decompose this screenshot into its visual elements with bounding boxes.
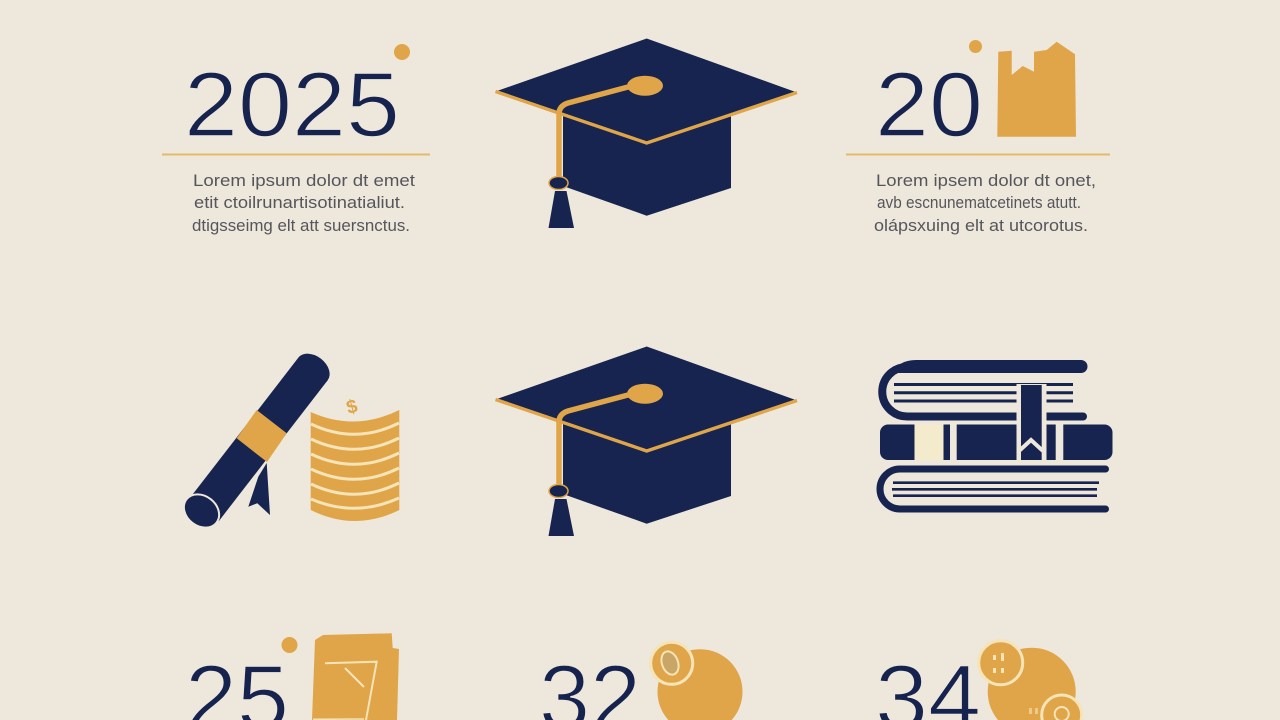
icon: gold document [312, 633, 399, 720]
heading: 2025: 2025 [184, 54, 400, 156]
text block: top left description: dtigsseimg elt att suersnctus. [192, 217, 410, 235]
icon: gold dot [282, 637, 298, 653]
icon: gold coins [979, 641, 1082, 720]
text block: top right description: Lorem ipsem dolor dt onet, [876, 172, 1096, 190]
icon: diploma scroll [177, 347, 336, 535]
panel: bottom centre number and coin [539, 642, 742, 720]
panel: bottom right number and coins [875, 641, 1082, 720]
text block: top right description: olápsxuing elt at utcorotus. [874, 217, 1088, 235]
icon: gold dot [394, 44, 410, 60]
icon: stack of books [880, 360, 1112, 509]
icon: coin stack [311, 396, 399, 521]
panel: top right year block [846, 40, 1110, 235]
icon: gold building block [997, 42, 1076, 137]
icon: gold coins [651, 642, 742, 720]
icon: graduation cap middle [496, 346, 797, 536]
text block: top left description: Lorem ipsum dolor dt emet [193, 172, 415, 190]
text block: top right description [874, 172, 1096, 235]
panel: bottom left number and folder [185, 633, 399, 720]
heading: 20: 20 [875, 54, 983, 156]
text block: top right description: avb escnunematcetinets atutt. [877, 194, 1081, 212]
text block: top left description: etit ctoilrunartisotinatialiut. [194, 194, 405, 212]
icon: dollar sign: $ [344, 396, 360, 419]
panel: top left year block [162, 44, 430, 235]
text block: top left description [192, 172, 415, 235]
icon: graduation cap top [496, 38, 797, 228]
icon: gold dot [969, 40, 982, 53]
